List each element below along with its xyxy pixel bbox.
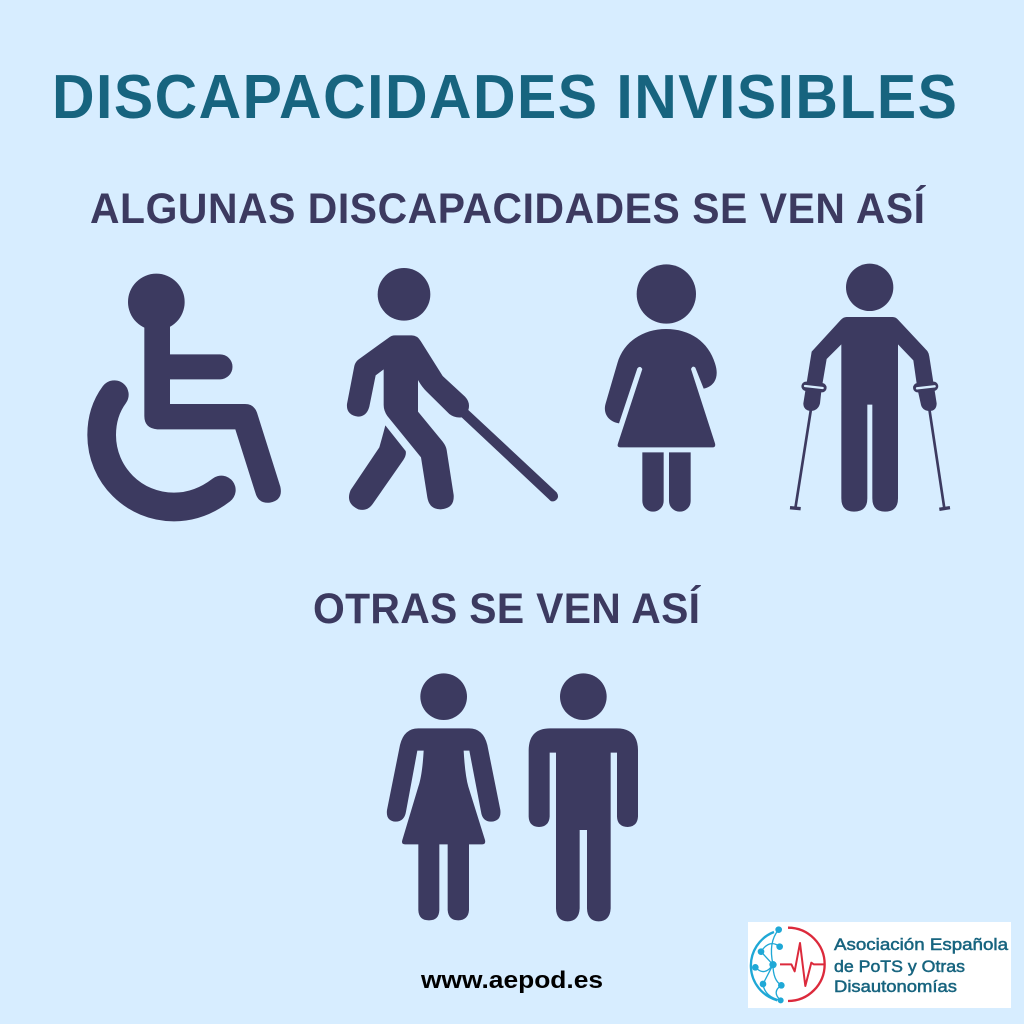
icon: wheelchair user xyxy=(102,274,281,507)
heading: others look like this: OTRAS SE VEN ASÍ xyxy=(313,584,701,632)
logo text: de PoTS y Otras xyxy=(834,958,965,976)
logo emblem xyxy=(751,926,825,1003)
icon: man standing xyxy=(529,673,638,921)
logo panel xyxy=(748,922,1011,1008)
website url: www.aepod.es xyxy=(420,967,603,994)
heading: some disabilities look like this: ALGUNAS DISCAPACIDADES SE VEN ASÍ xyxy=(90,184,926,232)
icon: woman with prosthetic arm xyxy=(605,264,717,512)
icon: woman standing xyxy=(387,673,500,920)
logo text xyxy=(834,936,1009,996)
icon: man on crutches xyxy=(790,264,950,512)
logo text: Asociación Española xyxy=(834,936,1009,954)
logo text: Disautonomías xyxy=(834,978,957,996)
icon: person with white cane xyxy=(347,268,558,510)
title: DISCAPACIDADES INVISIBLES xyxy=(52,62,957,131)
